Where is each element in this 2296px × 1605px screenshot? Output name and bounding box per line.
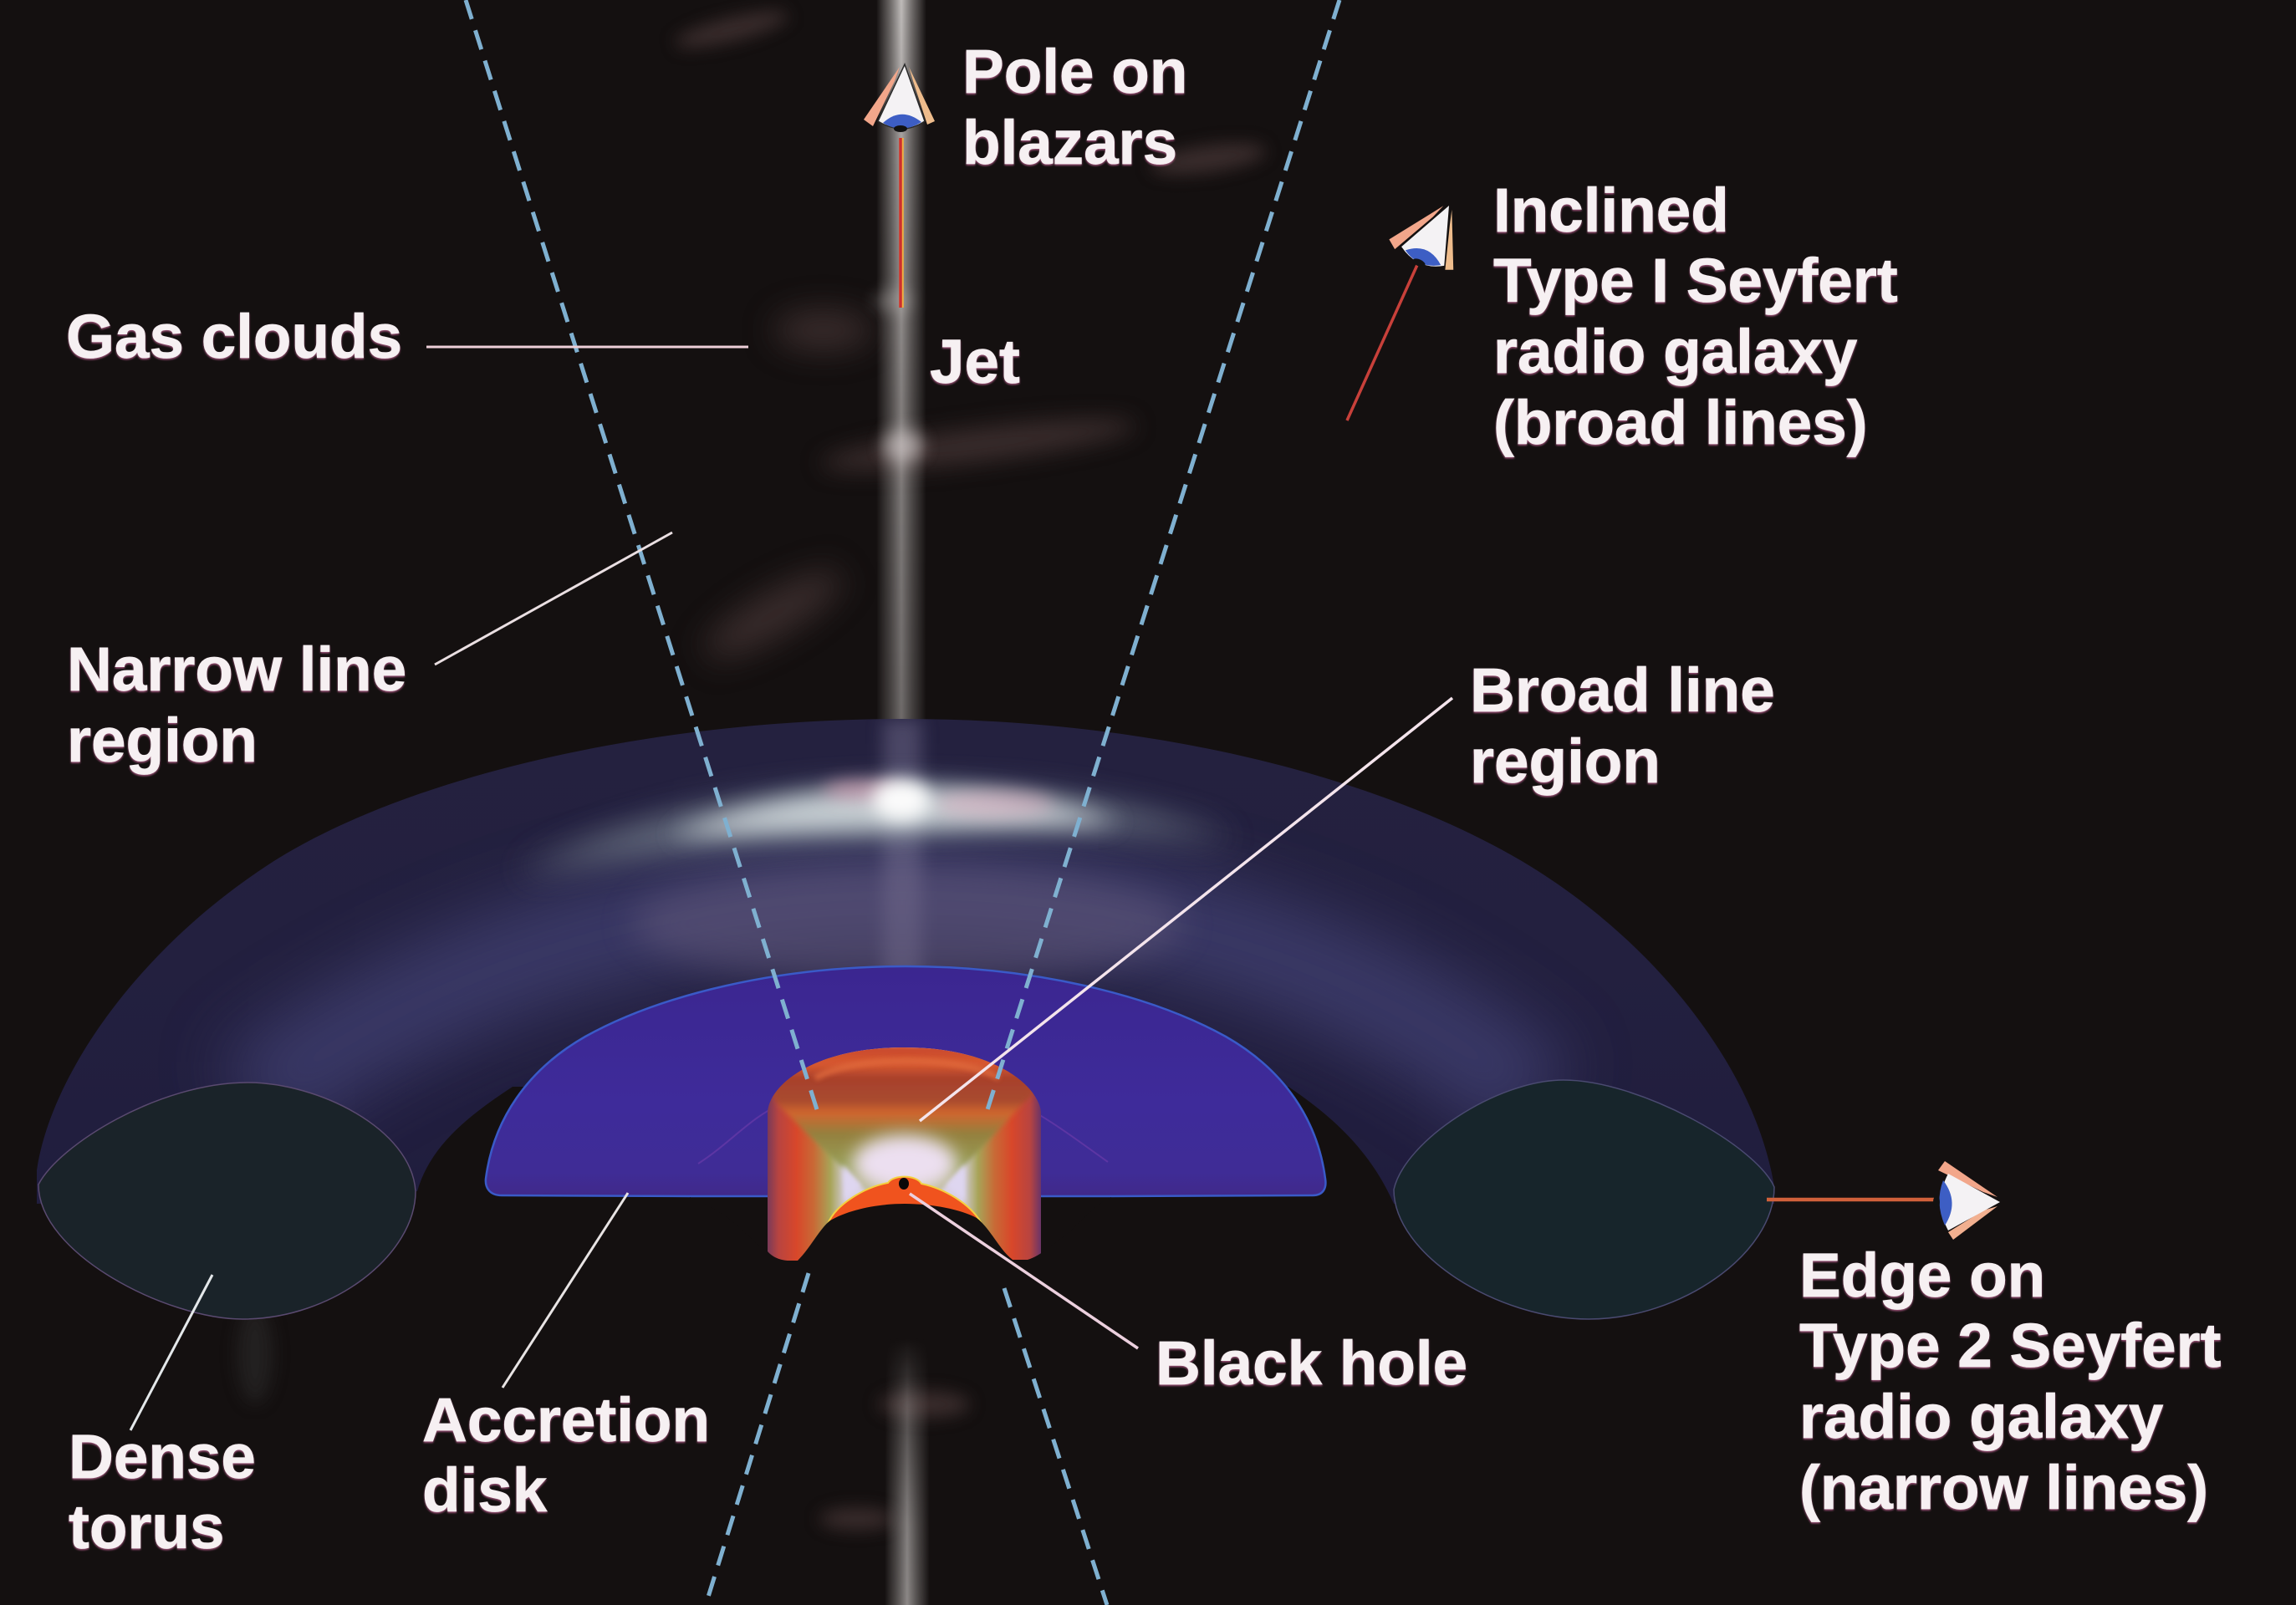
label: edge on type 2 seyfert: (narrow lines) <box>1799 1452 2208 1522</box>
label: broad line region: region <box>1470 726 1661 796</box>
dense torus: right cross-section <box>1394 1080 1774 1319</box>
disk inner ridge <box>698 1105 1108 1164</box>
label: pole on blazars: blazars <box>962 107 1177 177</box>
label: edge on type 2 seyfert: radio galaxy <box>1799 1381 2164 1451</box>
label: narrow line region: Narrow line <box>67 634 406 704</box>
leader line: narrow line region <box>435 532 672 665</box>
leader line: dense torus <box>130 1275 212 1430</box>
icon: eye pole on <box>864 64 935 132</box>
dark cavity below disk <box>690 1197 1111 1304</box>
leader line: edge on <box>1767 1198 1935 1201</box>
label: inclined type I seyfert: Type I Seyfert <box>1493 245 1898 315</box>
leader line: black hole <box>910 1194 1138 1348</box>
label: edge on type 2 seyfert: Type 2 Seyfert <box>1799 1310 2221 1380</box>
leader line: broad line region <box>920 698 1452 1121</box>
label: dense torus: torus <box>69 1491 224 1562</box>
bright glow band <box>518 780 1237 874</box>
top rim highlight <box>815 1061 999 1078</box>
inner orange dome <box>828 1177 981 1237</box>
icon: eye inclined <box>1384 189 1477 280</box>
central white glow <box>853 1135 957 1192</box>
dense torus: left cross-section <box>38 1083 416 1319</box>
leader line: gas clouds <box>426 346 748 348</box>
lavender haze above disk <box>631 865 1183 982</box>
label: gas clouds: Gas clouds <box>66 301 402 371</box>
label: pole on blazars: Pole on <box>962 36 1187 106</box>
label: accretion disk: Accretion <box>422 1384 710 1455</box>
label: broad line region: Broad line <box>1470 655 1775 725</box>
label: narrow line region: region <box>67 705 258 775</box>
upper cone <box>773 1047 1035 1190</box>
label: inclined type I seyfert: radio galaxy <box>1493 316 1858 386</box>
accretion disk <box>486 966 1325 1196</box>
label: accretion disk: disk <box>422 1455 548 1525</box>
label: inclined type I seyfert: Inclined <box>1493 175 1729 245</box>
leader line: accretion disk <box>503 1193 628 1388</box>
torus body <box>0 711 1839 1212</box>
icon: eye edge on <box>1933 1161 2000 1240</box>
label: dense torus: Dense <box>69 1421 256 1491</box>
diffuse haze along inner torus <box>251 894 1538 1103</box>
leader line: inclined <box>1347 265 1417 420</box>
lavender wedges <box>843 1164 965 1201</box>
gas clouds <box>237 3 1268 1530</box>
label: jet: Jet <box>930 326 1020 396</box>
label: inclined type I seyfert: (broad lines) <box>1493 387 1868 457</box>
jet seen through torus <box>883 719 921 1070</box>
jet <box>875 0 930 1605</box>
label: edge on type 2 seyfert: Edge on <box>1799 1240 2045 1310</box>
black hole <box>899 1178 909 1190</box>
broad line region: central cylinder <box>768 1045 1041 1271</box>
label: black hole: Black hole <box>1156 1327 1467 1398</box>
dashed cone boundaries <box>466 0 1339 1605</box>
